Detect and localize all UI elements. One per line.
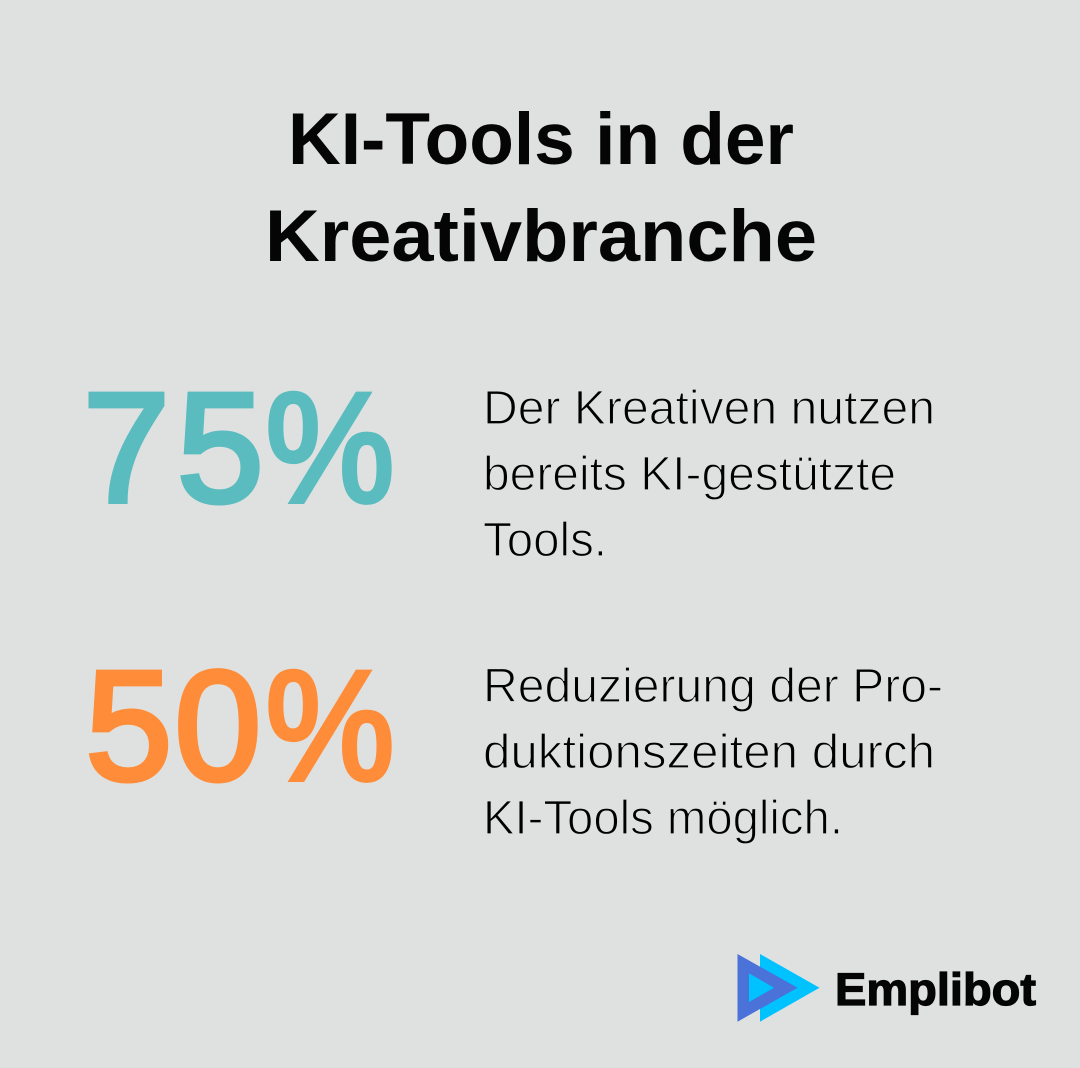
big number: 75%: % [266,361,394,535]
big number: 50%: 5 [86,640,172,814]
description: 50%: KI-Tools möglich. [483,792,843,845]
big number: 50% [86,639,394,814]
big number: 50%: % [266,639,394,813]
logo: Emplibot [738,954,1036,1022]
big number: 75% [83,361,394,536]
title: Kreativbranche [265,196,817,277]
description: 50% [483,660,943,845]
description: 50%: duktionszeiten durch [483,726,935,779]
wordmark: Emplibot [835,964,1036,1015]
icon: play triangles [738,954,820,1022]
title [265,99,817,277]
description: 75%: Der Kreativen nutzen [483,382,935,435]
big number: 75%: 7 [83,362,170,536]
panel: statistic 75% [83,361,935,567]
big number: 75%: 5 [177,362,264,536]
big number: 50%: 0 [174,640,261,814]
panel: statistic 50% [86,639,943,845]
description: 75%: Tools. [483,514,607,567]
description: 75%: bereits KI-gestützte [483,448,896,501]
description: 50%: Reduzierung der Pro- [483,660,943,713]
description: 75% [483,382,935,567]
title: KI-Tools in der [288,99,794,180]
